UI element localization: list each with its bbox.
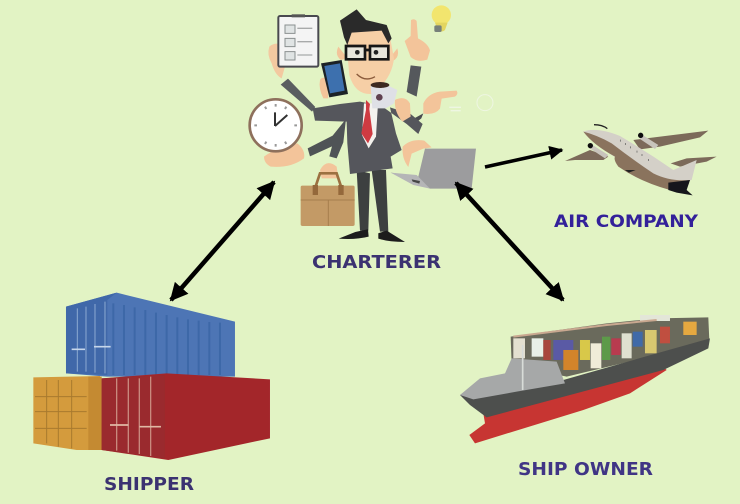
icon: stacked shipping containers [33,293,270,460]
label: ship owner: SHIP OWNER [518,460,654,480]
blue container [66,293,235,377]
orange container [33,376,102,450]
icon: aeroplane [565,125,717,195]
icon: pointing hand [408,91,493,127]
label: air company: AIR COMPANY [554,212,699,231]
arrow: charterer to ship owner [456,183,563,300]
bow deck [460,358,565,399]
icon: light bulb [432,5,451,32]
grey hull [460,338,710,417]
containers on deck [511,315,709,377]
icon: clipboard held in hand [268,14,318,78]
icon: smartphone [320,60,348,98]
label: charterer: CHARTERER [312,253,442,273]
icon: container ship [460,315,710,443]
icon: raised finger hand and sleeve [405,19,430,97]
label: shipper: SHIPPER [104,475,195,495]
red lower hull [469,367,667,443]
icon: coffee cup and hand [371,82,411,122]
arrow: charterer to shipper [171,182,274,300]
icon: head with glasses [337,9,398,94]
icon: laptop with hand [391,140,476,189]
red container [102,373,270,460]
arrow: charterer to air company [485,150,562,167]
icon: charterer businessman [250,5,493,242]
icon: suit body and arms [281,79,423,242]
icon: briefcase with hand [301,163,355,226]
icon: wall clock [250,99,304,167]
